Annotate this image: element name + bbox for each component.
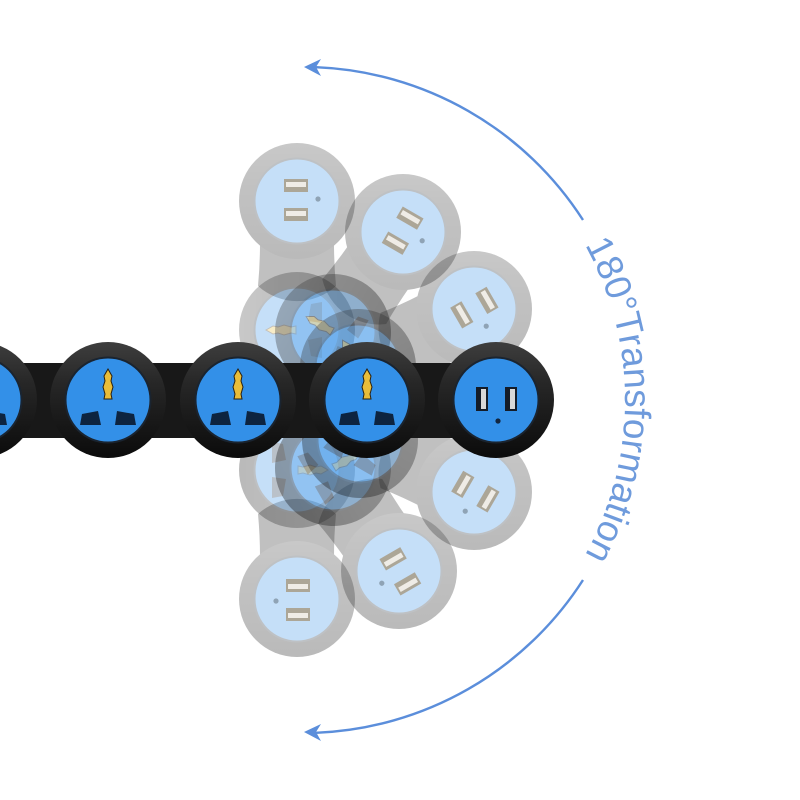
ghost socket: lower position hidden 1 <box>239 412 355 528</box>
ghost socket: upper USB at -60 degrees <box>314 174 461 336</box>
socket: universal 3 <box>309 342 425 458</box>
arrow: upper arc <box>304 59 583 220</box>
ghost socket: lower USB at 90 degrees <box>239 499 355 657</box>
ghost socket: lower USB at 30 degrees <box>367 412 532 550</box>
ghost socket: upper hidden 3 <box>279 288 437 446</box>
socket: universal, cut off at left edge <box>0 342 37 458</box>
arrow: lower arc <box>304 580 583 741</box>
strip body <box>0 363 496 438</box>
ghost socket: upper USB at -90 degrees <box>239 143 355 301</box>
socket: USB module <box>438 342 554 458</box>
ghost socket: lower USB at 60 degrees <box>310 467 457 629</box>
ghost socket: upper USB at -30 degrees <box>367 251 532 389</box>
socket: universal 2 <box>180 342 296 458</box>
power strip <box>0 342 554 458</box>
ghost socket: upper hidden 2 <box>254 253 412 411</box>
ghost socket: upper position hidden 1 <box>239 272 355 388</box>
faded rotation positions: lower <box>239 361 532 657</box>
socket: universal 1 <box>50 342 166 458</box>
ghost socket: lower hidden 2 <box>254 389 412 547</box>
ghost socket: lower hidden 3 <box>281 361 439 519</box>
label: 180° Transformation: 180°Transformation <box>586 238 652 560</box>
faded rotation positions: upper <box>239 143 532 446</box>
